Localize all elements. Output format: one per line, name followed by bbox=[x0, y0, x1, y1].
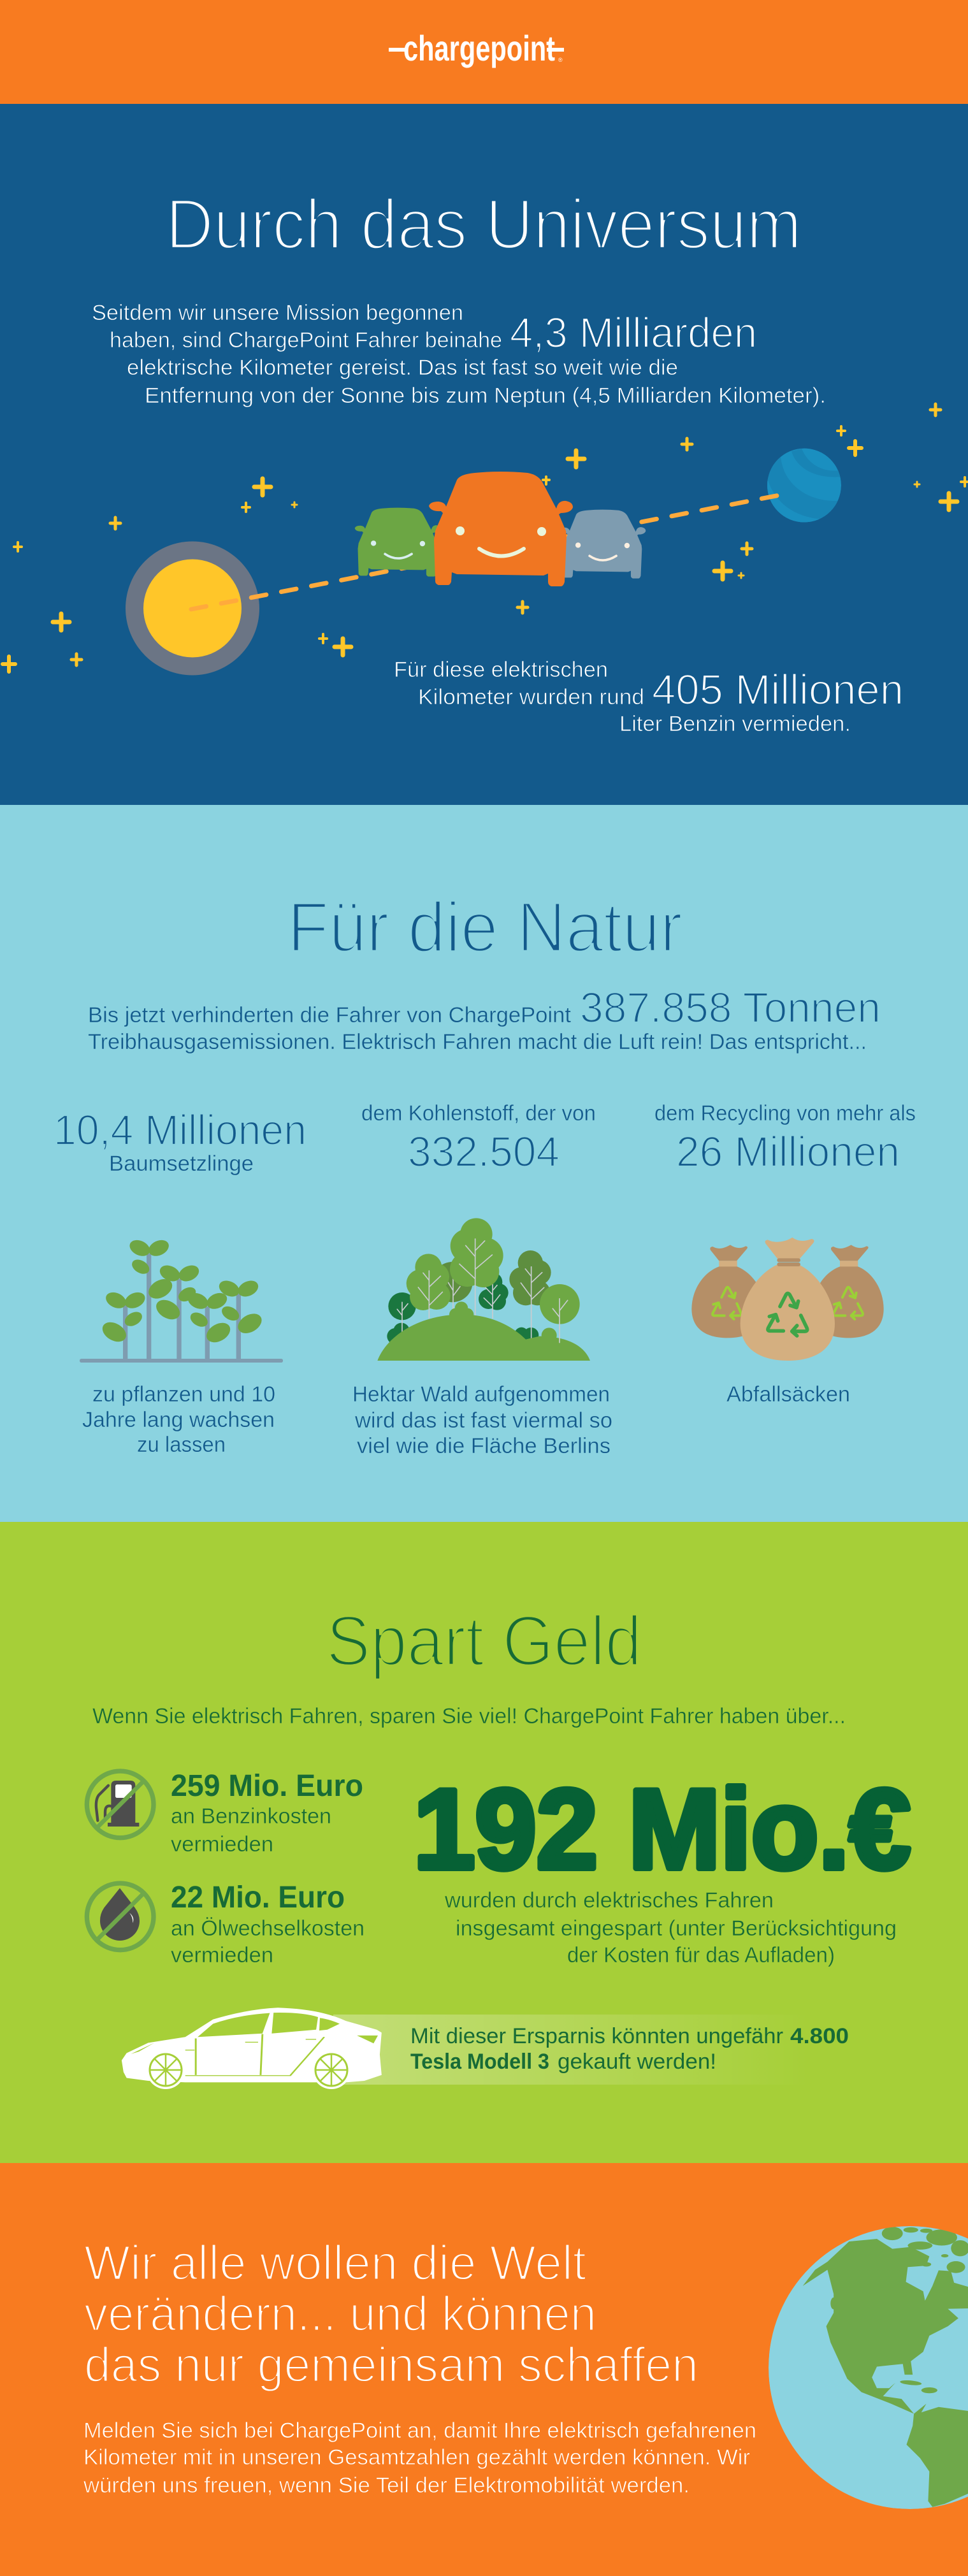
car: orange bbox=[429, 472, 573, 586]
fuel saved text: Liter Benzin vermieden. bbox=[619, 712, 851, 736]
intro text: 387.858 Tonnen bbox=[580, 984, 881, 1032]
fuel saved text: 405 Millionen bbox=[652, 666, 904, 714]
stat: recycling: dem Recycling von mehr als bbox=[654, 1101, 916, 1125]
body text: Melden Sie sich bei ChargePoint an, damit Ihre elektrisch gefahrenen bbox=[83, 2419, 756, 2443]
savings text: wurden durch elektrisches Fahren bbox=[444, 1888, 774, 1913]
big number: 192 Mio.€ bbox=[414, 1765, 911, 1893]
heading: Für die Natur bbox=[287, 888, 683, 967]
savings text: insgesamt eingespart (unter Berücksichtigung bbox=[456, 1916, 897, 1941]
stat: carbon bbox=[361, 1101, 596, 1176]
fuel saved text: Für diese elektrischen bbox=[394, 658, 608, 682]
caption: forest bbox=[352, 1382, 612, 1458]
banner: tesla callout: 4.800 bbox=[790, 2024, 849, 2048]
logo: chargepoint: chargepoint bbox=[403, 28, 555, 68]
center bag bbox=[740, 1238, 835, 1361]
car: green bbox=[355, 508, 441, 577]
caption: seedlings: zu lassen bbox=[137, 1433, 226, 1457]
stat: oil change costs bbox=[171, 1881, 365, 1967]
stat: recycling bbox=[654, 1101, 916, 1176]
intro text: Entfernung von der Sonne bis zum Neptun (4,5 Milliarden Kilometer). bbox=[145, 384, 826, 408]
savings text bbox=[444, 1888, 897, 1967]
heading: Spart Geld bbox=[326, 1602, 642, 1681]
stat: oil change costs: an Ölwechselkosten bbox=[171, 1916, 365, 1941]
title: Durch das Universum bbox=[166, 185, 802, 264]
heading bbox=[84, 2236, 698, 2392]
stat: oil change costs: vermieden bbox=[171, 1943, 273, 1967]
route line bbox=[191, 495, 779, 609]
caption: seedlings: Jahre lang wachsen bbox=[82, 1408, 275, 1432]
body text bbox=[83, 2419, 756, 2498]
intro text bbox=[92, 301, 826, 408]
heading: Wir alle wollen die Welt bbox=[84, 2236, 586, 2290]
icon: recycling bags bbox=[691, 1238, 884, 1361]
banner: tesla callout: gekauft werden! bbox=[558, 2050, 716, 2074]
caption: bags: Abfallsäcken bbox=[726, 1382, 850, 1407]
stat: carbon: 332.504 bbox=[408, 1128, 560, 1176]
intro text: 4,3 Milliarden bbox=[510, 309, 757, 357]
stat: carbon: dem Kohlenstoff, der von bbox=[361, 1101, 596, 1125]
stat: seedlings: 10,4 Millionen bbox=[54, 1106, 307, 1154]
icon: no fuel pump bbox=[87, 1771, 154, 1838]
intro text: haben, sind ChargePoint Fahrer beinahe bbox=[110, 328, 502, 352]
banner: tesla callout: Mit dieser Ersparnis könnten ungefähr bbox=[410, 2024, 783, 2048]
panel: durch das universum bbox=[0, 104, 968, 805]
caption: forest: Hektar Wald aufgenommen bbox=[352, 1382, 610, 1407]
icon: no oil drop bbox=[87, 1883, 154, 1950]
stat: fuel costs: an Benzinkosten bbox=[171, 1804, 331, 1828]
panel: für die natur bbox=[0, 805, 968, 1522]
caption: seedlings: zu pflanzen und 10 bbox=[92, 1382, 275, 1407]
intro text: Wenn Sie elektrisch Fahren, sparen Sie viel! ChargePoint Fahrer haben über... bbox=[92, 1704, 846, 1728]
intro text: Treibhausgasemissionen. Elektrisch Fahren macht die Luft rein! Das entspricht... bbox=[88, 1030, 867, 1054]
stat: seedlings: Baumsetzlinge bbox=[109, 1152, 254, 1176]
heading: verändern... und können bbox=[84, 2287, 596, 2341]
body text: würden uns freuen, wenn Sie Teil der Elektromobilität werden. bbox=[83, 2473, 690, 2498]
icon: forest bbox=[377, 1218, 590, 1361]
planet neptune bbox=[767, 449, 841, 523]
savings text: der Kosten für das Aufladen) bbox=[567, 1943, 835, 1967]
stat: oil change costs: 22 Mio. Euro bbox=[171, 1881, 345, 1914]
panel: header bbox=[0, 0, 968, 104]
panel: spart geld bbox=[0, 1522, 968, 2163]
intro text: Seitdem wir unsere Mission begonnen bbox=[92, 301, 463, 325]
caption: forest: viel wie die Fläche Berlins bbox=[357, 1434, 610, 1458]
caption: forest: wird das ist fast viermal so bbox=[354, 1408, 612, 1433]
heading: das nur gemeinsam schaffen bbox=[84, 2338, 698, 2392]
icon: seedlings bbox=[80, 1237, 283, 1363]
stat: fuel costs bbox=[171, 1769, 363, 1856]
car: grey bbox=[560, 510, 646, 579]
right bag bbox=[813, 1245, 884, 1338]
intro text: elektrische Kilometer gereist. Das ist fast so weit wie die bbox=[127, 356, 678, 380]
left bag bbox=[691, 1245, 765, 1338]
icon: white car bbox=[122, 2008, 382, 2089]
stat: recycling: 26 Millionen bbox=[676, 1128, 900, 1176]
icon: globe bbox=[769, 2226, 968, 2509]
caption: seedlings bbox=[82, 1382, 275, 1457]
stat: seedlings bbox=[54, 1106, 307, 1176]
logo: chargepoint: ® bbox=[558, 57, 563, 63]
stat: fuel costs: vermieden bbox=[171, 1832, 273, 1856]
panel: call to action bbox=[84, 2226, 968, 2509]
stars bbox=[3, 404, 968, 672]
sun bbox=[126, 542, 259, 676]
fuel saved text bbox=[394, 658, 904, 736]
intro text bbox=[88, 984, 881, 1054]
body text: Kilometer mit in unseren Gesamtzahlen gezählt werden können. Wir bbox=[83, 2445, 750, 2470]
fuel saved text: Kilometer wurden rund bbox=[418, 685, 644, 709]
banner: tesla callout: Tesla Modell 3 bbox=[410, 2050, 549, 2074]
stat: fuel costs: 259 Mio. Euro bbox=[171, 1769, 363, 1803]
banner: tesla callout bbox=[333, 2015, 849, 2085]
intro text: Bis jetzt verhinderten die Fahrer von ChargePoint bbox=[88, 1003, 572, 1027]
